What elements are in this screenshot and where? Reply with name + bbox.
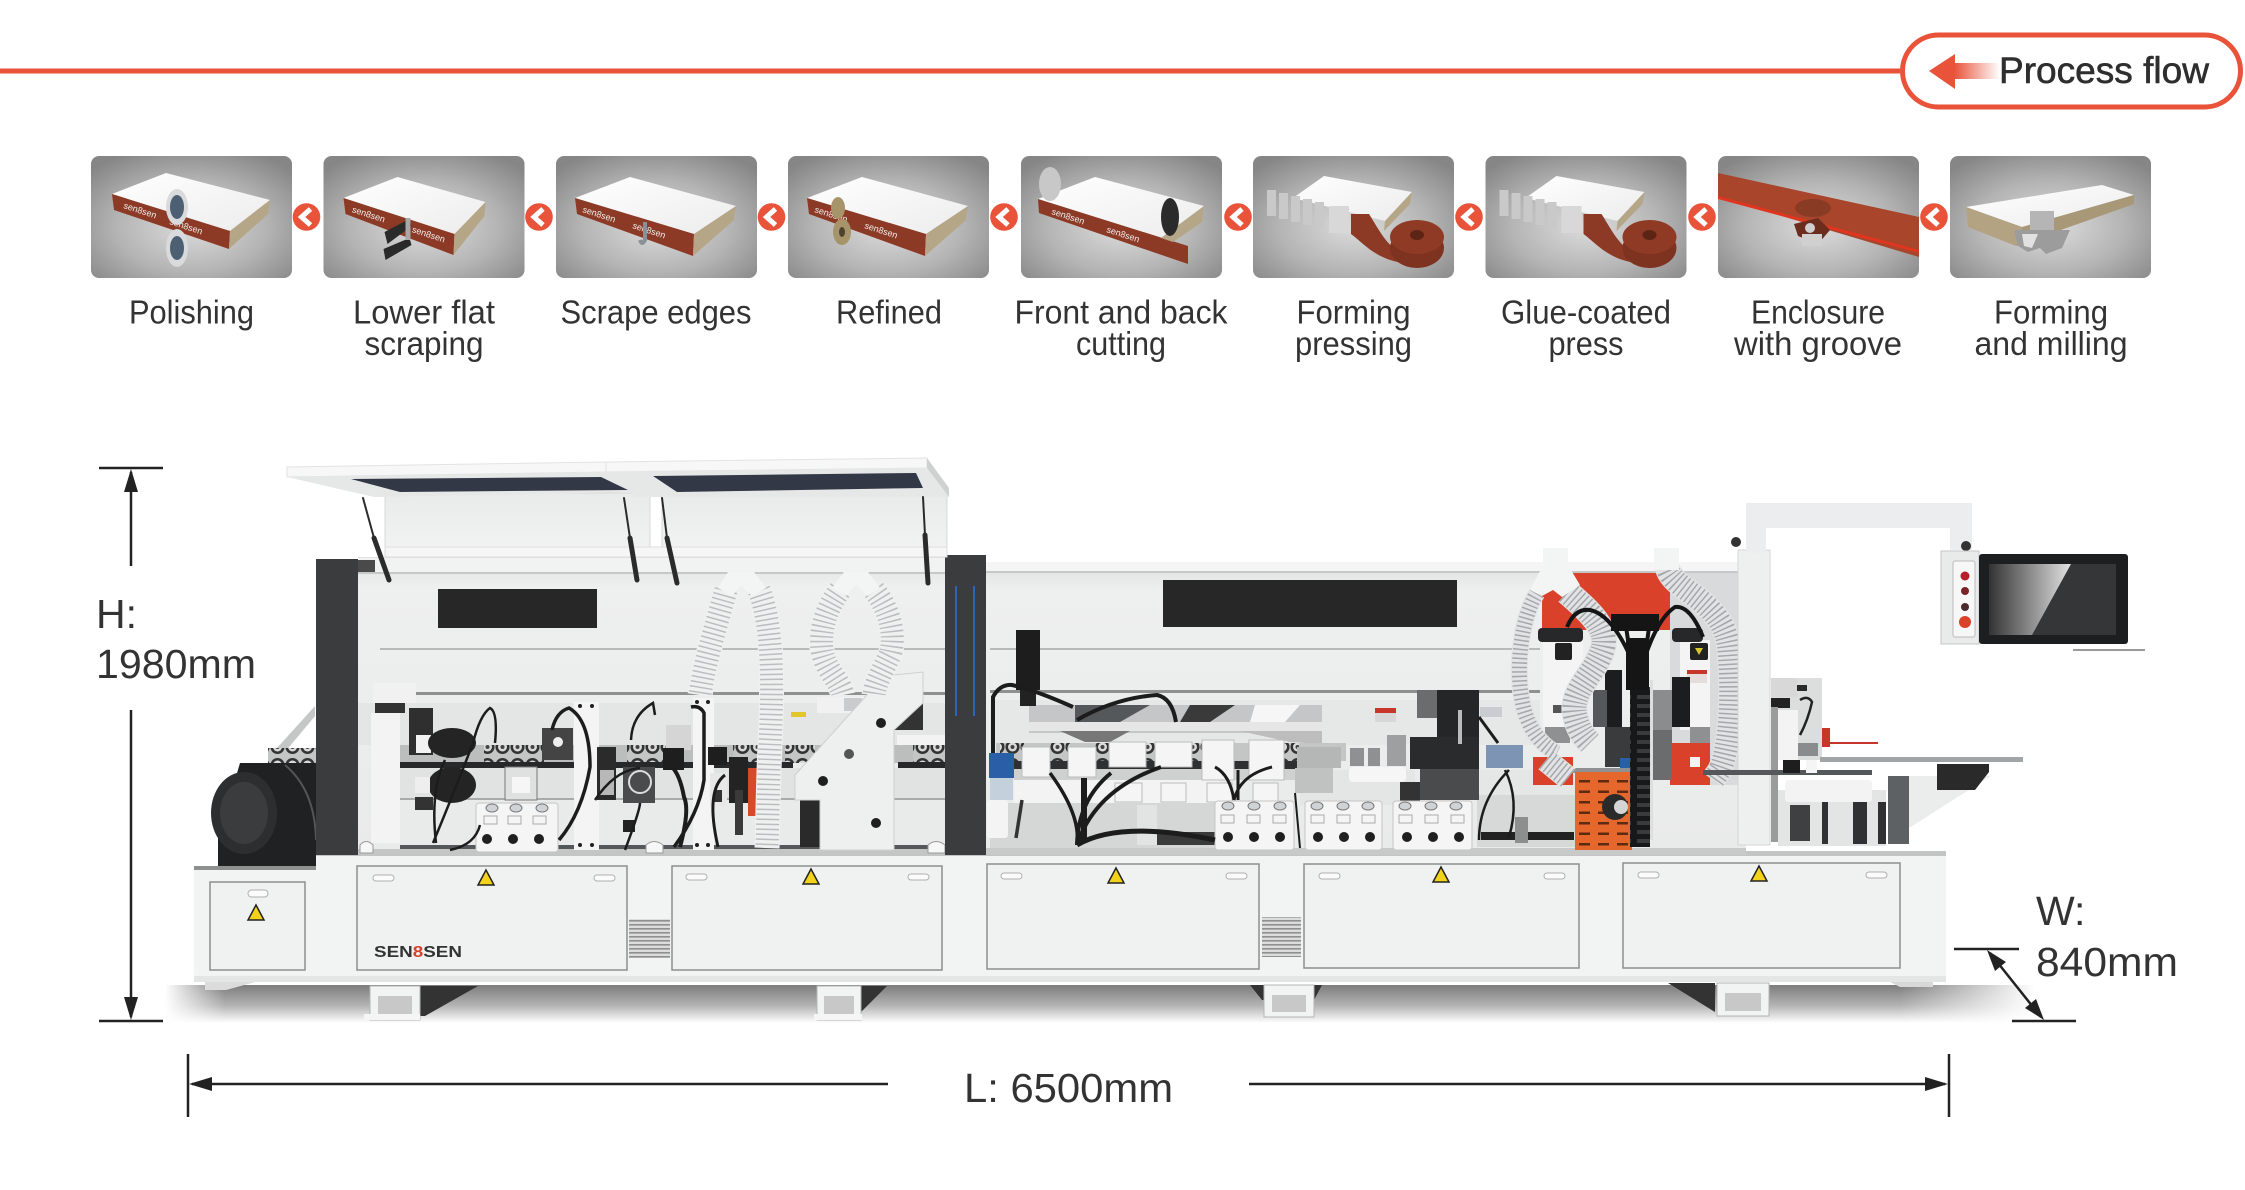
step thumbnail: front and back cutting <box>1021 156 1222 278</box>
step label: refined: Refined <box>836 294 942 330</box>
dimension: width <box>1954 888 2178 1021</box>
door handles <box>248 872 1887 897</box>
feed head blocks <box>371 683 537 843</box>
infeed table <box>1703 678 2023 846</box>
step thumbnail: refined: sen8sen <box>863 220 899 240</box>
step thumbnail: forming and milling <box>1950 156 2151 278</box>
cables left <box>433 703 725 850</box>
warning triangles <box>248 866 1767 920</box>
step label: forming and milling <box>1974 294 2128 362</box>
left mechanical section <box>358 672 945 855</box>
process flow header line <box>0 68 1900 74</box>
step label: enclosure with groove: with groove <box>1733 325 1902 362</box>
step thumbnail: scrape edges: sen8sen <box>581 204 617 224</box>
process flow badge <box>1902 35 2240 107</box>
badge pill outline <box>1902 35 2240 107</box>
step label: scrape edges: Scrape edges <box>560 294 752 330</box>
motor strut and rollers <box>268 706 318 766</box>
floor brackets <box>360 842 945 853</box>
dimension: height <box>96 468 256 1021</box>
spindle unit right <box>1670 628 1710 785</box>
red back panel <box>1542 573 1670 630</box>
control box <box>1941 551 1979 644</box>
chrome panel <box>1029 705 1322 744</box>
silver block and chrome cylinders <box>1295 735 1406 793</box>
dimension: height: 1980mm <box>96 641 256 687</box>
step thumbnail: enclosure with groove <box>1718 156 1919 278</box>
step label: front and back cutting: cutting <box>1076 325 1166 362</box>
black label plate right <box>1163 580 1457 627</box>
step thumbnail: front and back cutting: sen8sen <box>1050 206 1086 226</box>
step thumbnail: polishing: sen8sen <box>122 200 158 220</box>
step thumbnail: front and back cutting: sen8sen <box>1105 224 1141 244</box>
vent grilles <box>629 917 1301 958</box>
left and middle pillars <box>316 555 986 855</box>
hood lids <box>287 458 949 497</box>
hose y-junctions <box>718 548 1679 597</box>
step thumbnail: polishing: sen8sen <box>168 216 204 236</box>
step label: glue-coated press: press <box>1548 325 1624 362</box>
chevron <box>758 203 785 231</box>
step label: forming and milling: Forming <box>1994 294 2108 330</box>
dimension: height: H: <box>96 591 137 637</box>
step label: forming pressing: pressing <box>1295 325 1412 362</box>
cables right <box>993 685 1514 848</box>
chevron <box>293 203 320 231</box>
drive motors centre <box>1593 670 1690 780</box>
orange guard box <box>1572 768 1632 850</box>
step thumbnail: polishing <box>91 156 292 278</box>
rail dark floor strip <box>400 845 945 849</box>
filter and glue pot motor <box>987 630 1040 838</box>
step label: enclosure with groove: Enclosure <box>1751 294 1885 330</box>
left housing wall <box>354 557 945 855</box>
step label: front and back cutting <box>1014 294 1228 362</box>
step label: forming pressing <box>1295 294 1412 362</box>
step label: forming pressing: Forming <box>1296 294 1410 330</box>
chevron <box>525 203 553 231</box>
gas struts <box>363 497 928 583</box>
step label: lower flat scraping <box>353 294 495 362</box>
step label: lower flat scraping: Lower flat <box>353 294 495 330</box>
step label: glue-coated press <box>1501 294 1671 362</box>
icon: fading arrow <box>1929 54 2000 89</box>
step thumbnail: scrape edges <box>556 156 757 278</box>
badge heading: Process flow <box>1999 50 2209 91</box>
machine illustration <box>194 458 2145 1020</box>
step thumbnail: lower flat scraping <box>324 156 524 278</box>
step label: forming and milling: and milling <box>1974 325 2128 362</box>
step label: glue-coated press: Glue-coated <box>1501 294 1671 330</box>
step thumbnail: lower flat scraping: sen8sen <box>411 224 446 244</box>
right mechanical section <box>986 628 1746 855</box>
gusset plate <box>795 672 923 850</box>
pressure roller blocks <box>1022 740 1284 802</box>
cabinet doors <box>210 863 1900 970</box>
levelling feet <box>205 979 1933 1020</box>
step thumbnail: forming pressing <box>1253 156 1454 278</box>
dimension: length <box>188 1054 1949 1117</box>
hinged hood <box>287 458 949 583</box>
dimension: width: W: <box>2036 888 2085 934</box>
hood glass <box>385 493 947 557</box>
step thumbnail: refined: sen8sen <box>813 204 849 224</box>
step thumbnail: glue-coated press <box>1486 156 1686 278</box>
dust hoses <box>700 548 1731 848</box>
black label plate left <box>438 589 597 628</box>
vertical plates <box>574 698 714 850</box>
cable fan over hoses <box>1567 607 1703 688</box>
panel: process steps row <box>91 156 2151 362</box>
chevron <box>1455 203 1483 231</box>
step thumbnail: scrape edges: sen8sen <box>631 220 667 240</box>
red safety labels <box>1375 707 1523 768</box>
wall shading right of spindles <box>1670 573 1738 785</box>
brand logo: SEN 8SEN <box>374 944 462 961</box>
base cabinet <box>194 851 1946 982</box>
black unit <box>1400 690 1479 802</box>
tool units <box>542 697 945 847</box>
step label: front and back cutting: Front and back <box>1014 294 1228 330</box>
chevron <box>1688 203 1716 231</box>
chevron <box>1224 203 1252 231</box>
step label: enclosure with groove <box>1733 294 1902 362</box>
drive motor <box>211 763 316 866</box>
gauge panels right <box>1215 801 1472 850</box>
gauge panel left <box>476 803 558 852</box>
chevron <box>990 203 1018 231</box>
step label: lower flat scraping: scraping <box>364 325 484 362</box>
touch-screen monitor <box>1979 554 2145 651</box>
right housing wall <box>986 562 1746 855</box>
dimension: width: 840mm <box>2036 939 2178 985</box>
step thumbnail: lower flat scraping: sen8sen <box>351 204 386 224</box>
drag chain <box>1630 680 1653 847</box>
step thumbnail: refined <box>788 156 989 278</box>
step label: polishing: Polishing <box>129 294 254 330</box>
dimension: length: L: 6500mm <box>964 1065 1173 1111</box>
lid dark panels <box>351 473 923 492</box>
monitor gantry <box>1731 503 1972 845</box>
spindle unit left <box>1533 628 1583 785</box>
chevron <box>1920 203 1948 231</box>
ground shadow <box>165 985 2035 1023</box>
